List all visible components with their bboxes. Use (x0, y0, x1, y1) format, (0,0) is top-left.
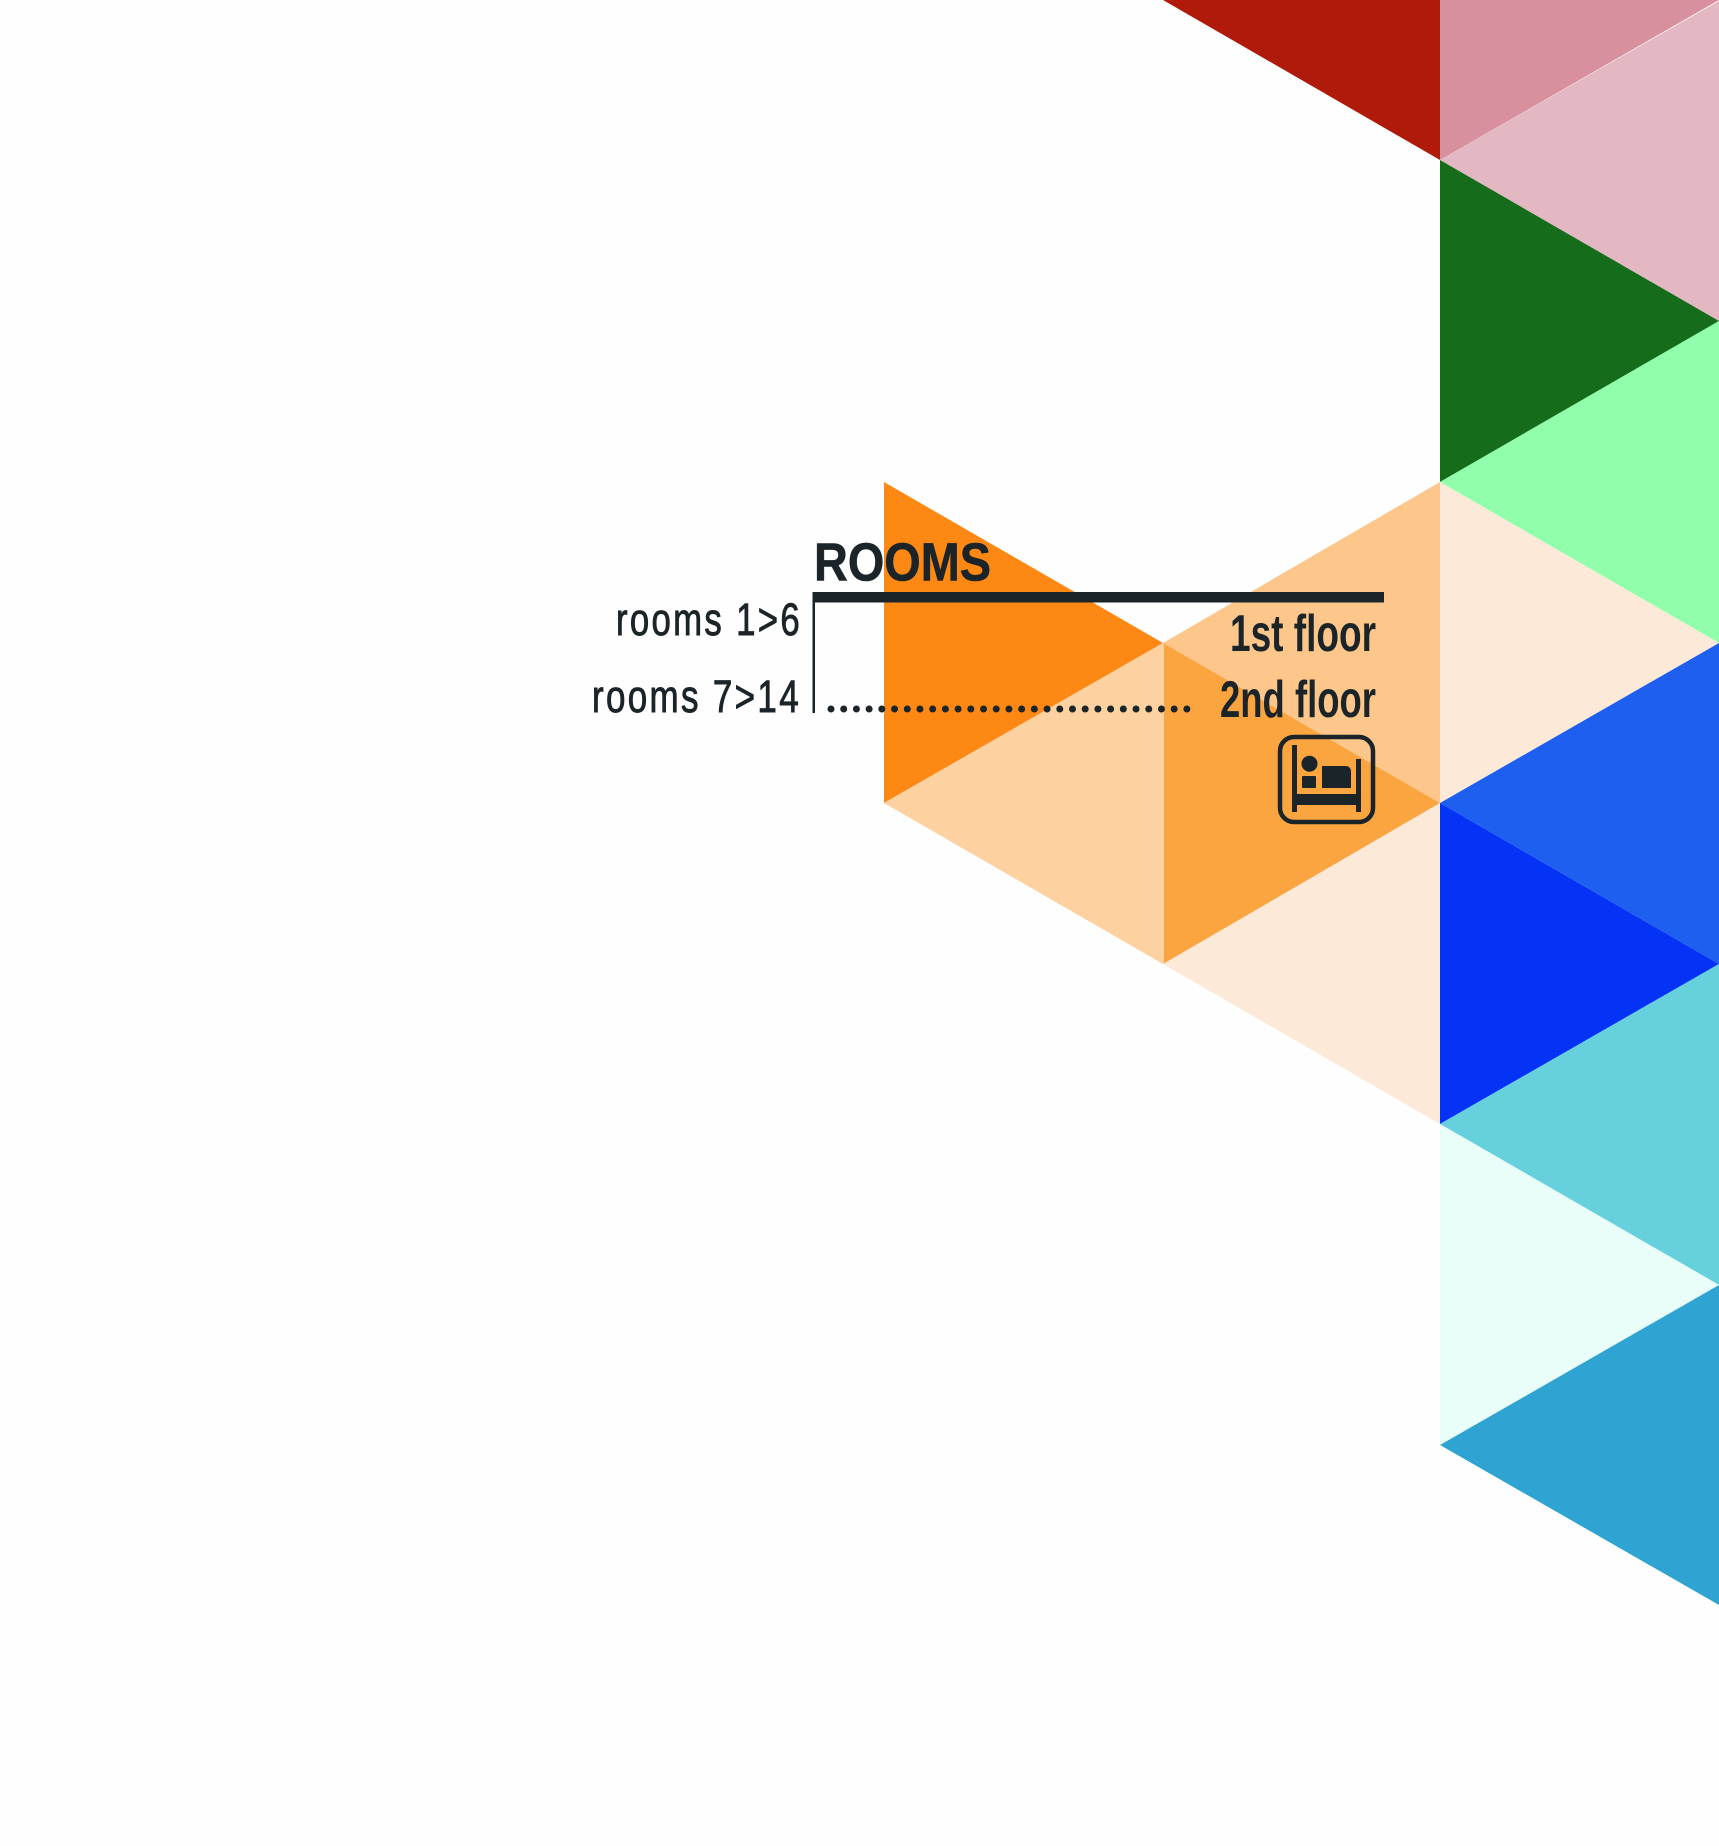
icon: bed in rounded square (1280, 737, 1373, 822)
label: rooms 7>14: rooms 7>14 (592, 671, 801, 722)
label: 2nd floor: 2nd floor (1220, 671, 1376, 729)
triangle: cream (1440, 482, 1719, 803)
heading rule (813, 592, 1384, 602)
triangle: mint green (1440, 321, 1719, 643)
triangle: peach (1163, 482, 1440, 803)
triangle: lower cream (1163, 803, 1440, 1124)
triangle: pale aqua (1440, 1124, 1719, 1445)
triangle: dusty pink (1440, 0, 1719, 160)
triangle: teal blue (1440, 1285, 1719, 1605)
sleeper head (1302, 756, 1318, 772)
icon frame (1280, 737, 1373, 822)
pillow (1302, 776, 1316, 788)
triangle: vivid blue (1440, 803, 1719, 1124)
bed frame (1292, 794, 1361, 805)
blanket (1322, 766, 1351, 788)
triangle: medium orange (1164, 643, 1440, 964)
bed right post (1356, 759, 1361, 812)
triangle: dark green (1440, 160, 1719, 482)
label: rooms 1>6: rooms 1>6 (616, 594, 802, 645)
triangle: medium blue (1440, 643, 1719, 964)
triangle column: right-hand colour band (1163, 0, 1719, 1605)
bed left post (1292, 745, 1297, 812)
triangle: cyan (1440, 964, 1719, 1285)
triangle: light pink (1440, 1, 1719, 321)
triangle: light peach (884, 643, 1163, 964)
triangle: dark red (1163, 0, 1440, 160)
triangle: saturated orange (884, 482, 1163, 803)
dotted leader line (831, 706, 1187, 712)
heading: ROOMS: ROOMS (814, 532, 991, 592)
bracket line (812, 592, 815, 713)
label: 1st floor: 1st floor (1230, 605, 1376, 663)
triangle cluster: orange band (884, 482, 1440, 1124)
